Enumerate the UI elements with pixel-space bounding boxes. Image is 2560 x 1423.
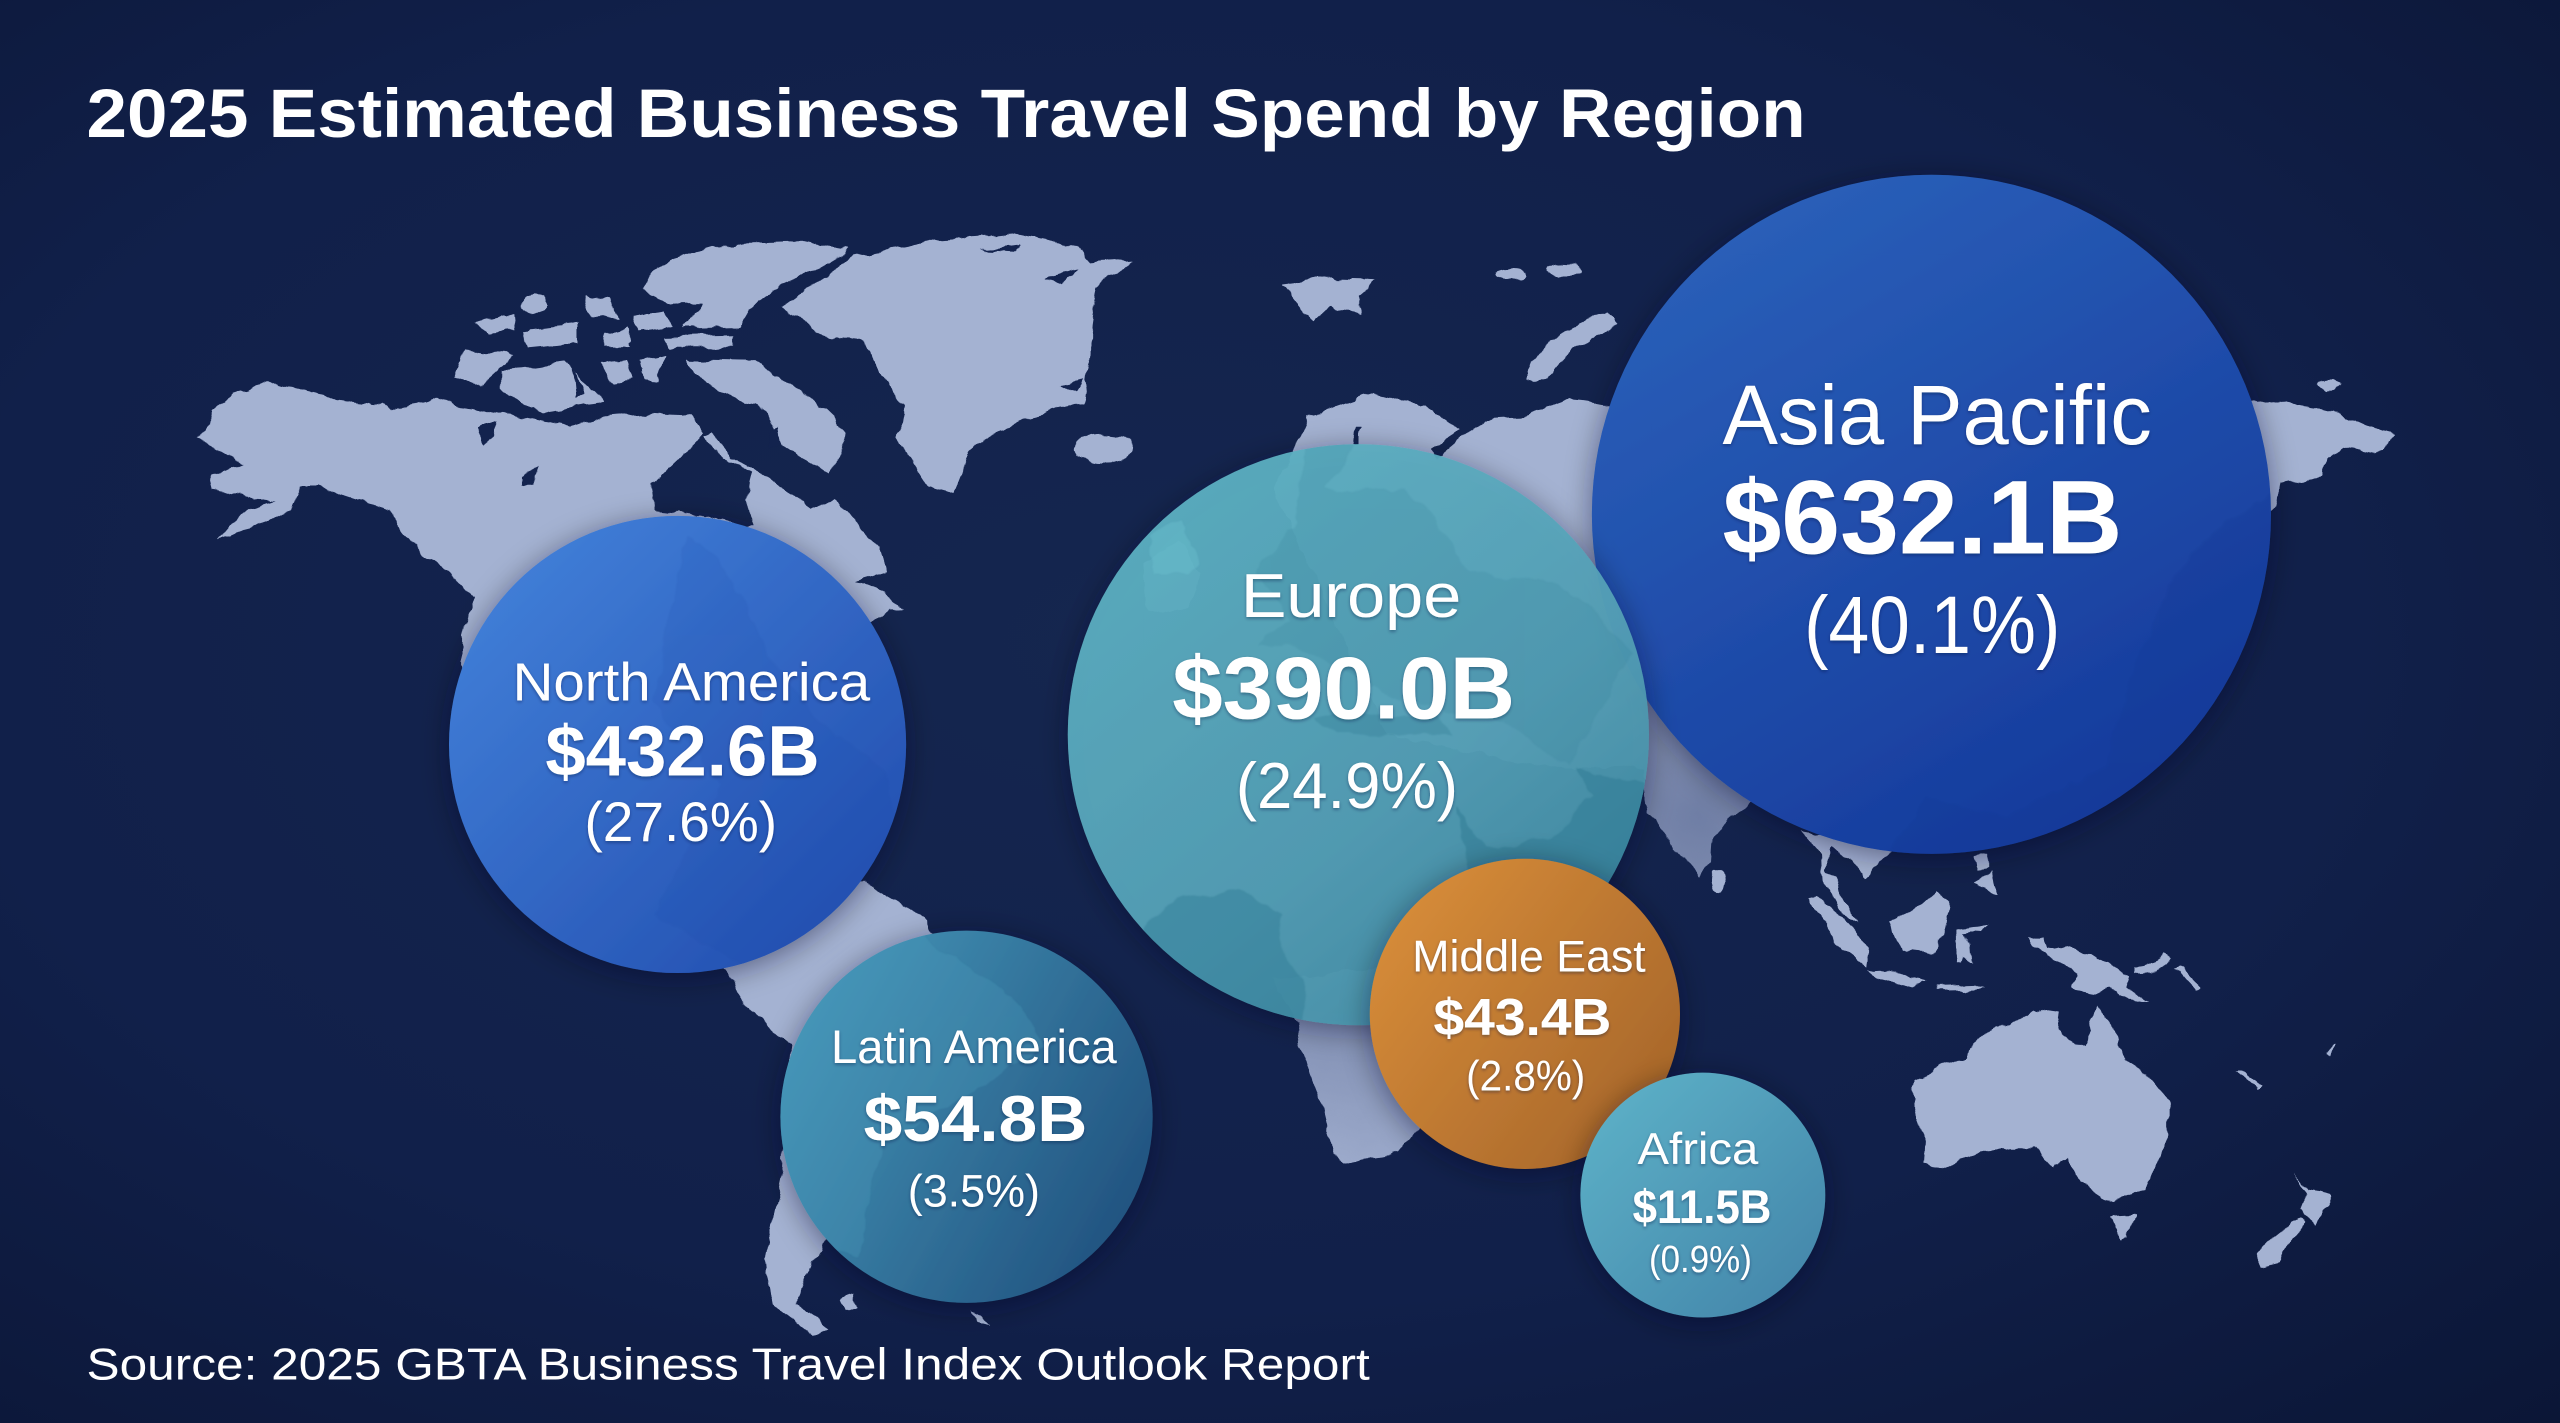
bubble: latin america: $54.8B: [864, 1082, 1087, 1155]
bubble: europe: Europe: [1241, 562, 1461, 631]
bubble: north america: $432.6B: [545, 711, 820, 791]
land: indochina: [1799, 831, 1892, 921]
bubble: africa: (0.9%): [1649, 1238, 1752, 1280]
bubble: asia pacific: [1592, 175, 2286, 882]
land: franz josef land: [1494, 263, 1582, 279]
bubble: north america: [449, 516, 906, 980]
land: victoria island: [501, 362, 606, 413]
bubble: africa: Africa: [1638, 1125, 1759, 1174]
bubble: middle east: $43.4B: [1433, 989, 1611, 1047]
land: south georgia: [971, 1311, 989, 1326]
bubble: latin america: [767, 914, 1153, 1303]
bubble: asia pacific: (40.1%): [1804, 580, 2060, 671]
land: svalbard: [1283, 278, 1375, 323]
bubble: africa: $11.5B: [1633, 1181, 1771, 1234]
land: novaya zemlya: [1528, 313, 1618, 380]
bubble: europe: (24.9%): [1236, 749, 1458, 822]
land: new britain: [2135, 953, 2170, 974]
land: greenland: [782, 233, 1133, 493]
bubble: europe: $390.0B: [1172, 638, 1515, 737]
source line: Source: 2025 GBTA Business Travel Index Outlook Report: [87, 1341, 1370, 1390]
land: southern africa: [1273, 963, 1469, 1164]
europe bubble: map relief: [1110, 444, 1649, 1045]
land: wrangel island: [2318, 380, 2341, 390]
land: eurasia: [1273, 392, 2393, 877]
land: sulawesi: [1956, 924, 1990, 965]
land: arctic islands: [473, 294, 733, 384]
bubble: middle east: Middle East: [1412, 932, 1646, 981]
water: lakes and fjords: [477, 245, 1360, 487]
land: borneo: [1889, 890, 1948, 953]
land: iceland: [1074, 434, 1133, 464]
land: new zealand south: [2255, 1218, 2304, 1265]
land: tasmania: [2111, 1215, 2135, 1239]
bubble: middle east: [1370, 859, 1680, 1169]
title: 2025 Estimated Business Travel Spend by Region: [87, 75, 1806, 152]
bubble: north america: (27.6%): [584, 791, 777, 853]
bubble: middle east: (2.8%): [1466, 1053, 1585, 1100]
bubble: latin america: Latin America: [831, 1021, 1117, 1074]
land: north america: [199, 384, 904, 975]
bubble: asia pacific: Asia Pacific: [1722, 367, 2152, 462]
land: pacific islands: [2176, 967, 2336, 1089]
bubble: latin america: (3.5%): [908, 1166, 1040, 1217]
land: sumatra: [1807, 898, 1869, 968]
land: british isles: [1143, 539, 1200, 614]
bubble: north america: North America: [513, 652, 870, 712]
land: baffin island: [682, 359, 847, 473]
bubble: asia pacific: $632.1B: [1722, 459, 2122, 576]
world map: [199, 233, 2393, 1335]
land: sri lanka: [1711, 869, 1724, 895]
land: new guinea: [2026, 937, 2149, 1002]
land: lesser sunda: [1936, 983, 1984, 989]
bubble: europe: [1068, 444, 1649, 1045]
land: falklands: [841, 1293, 856, 1311]
land: philippines: [1972, 854, 1998, 895]
land: south america: [718, 882, 1045, 1335]
land: australia: [1913, 1006, 2168, 1202]
land: banks island: [456, 349, 514, 387]
land: ellesmere: [642, 242, 847, 328]
land: java: [1869, 970, 1927, 988]
land: new zealand north: [2294, 1171, 2330, 1224]
bubble: africa: [1580, 1073, 1825, 1318]
